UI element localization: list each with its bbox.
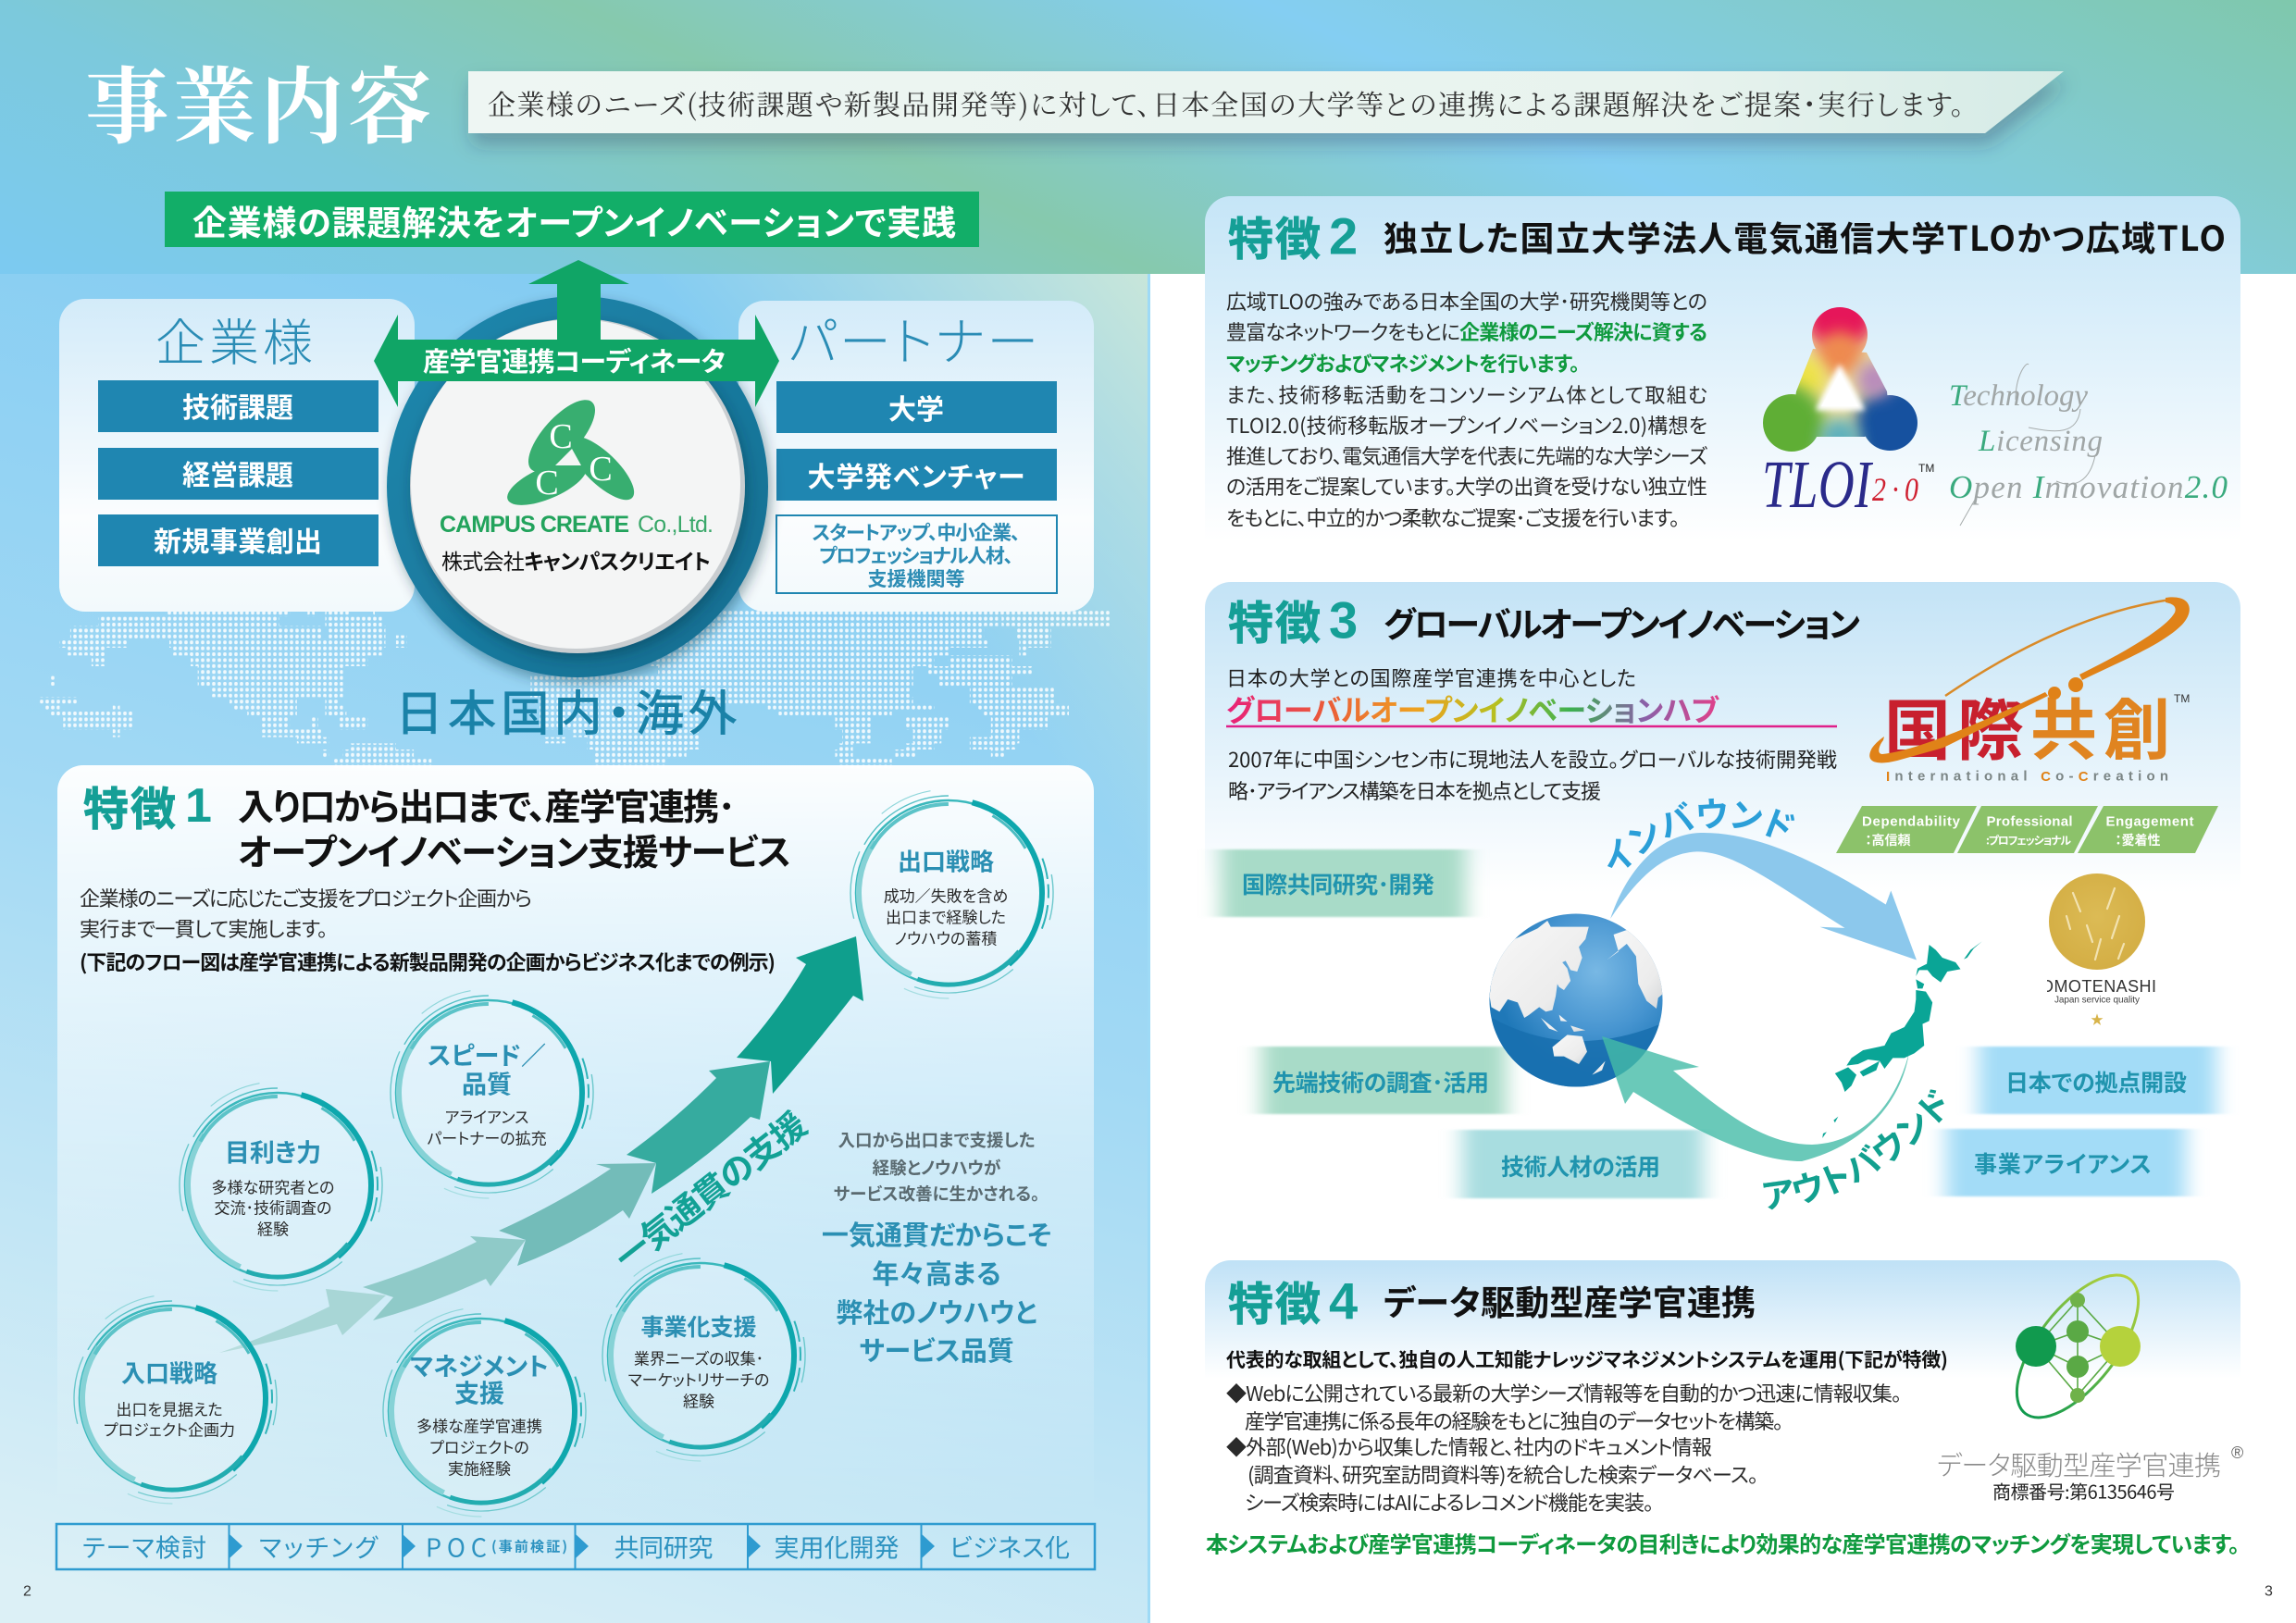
text block: 特徴3 body: 略･アライアンス構築を日本を拠点として支援 <box>1228 775 1601 805</box>
badges: values <box>1836 806 2218 853</box>
heading: 特徴1: 1 <box>185 779 212 833</box>
circle: 入口戦略: プロジェクト企画力 <box>104 1418 235 1440</box>
arrows: coordinator: 産学官連携コーディネータ <box>423 341 726 379</box>
text block: intro: 企業様のニーズに応じたご支援をプロジェクト企画から <box>80 883 532 912</box>
text: trademark: データ駆動型産学官連携 <box>1937 1444 2221 1483</box>
circle: 事業化支援: 経験 <box>683 1388 714 1412</box>
text: Technology Licensing Open Innovation <box>1949 364 2228 526</box>
text block: 特徴4 body <box>1226 1345 1948 1517</box>
circle: マネジメント支援: プロジェクトの <box>429 1434 529 1458</box>
icon: globe <box>1490 914 1664 1096</box>
text block: ノウハウ: 年々高まる <box>872 1253 1001 1292</box>
title: 事業内容 <box>85 40 431 160</box>
icon: TLOI 2.0 logo: TLOI <box>1762 447 1873 522</box>
flow bar: マッチング <box>259 1529 379 1564</box>
label: インバウンド: インバウンド <box>1607 798 1794 868</box>
heading: 特徴3: グローバルオープンイノベーション <box>1384 597 1860 647</box>
flow bar: (事前検証) <box>491 1536 567 1556</box>
centre circle: Campus Create <box>387 296 768 677</box>
text block: 特徴4 body: 産学官連携に係る長年の経験をもとに独自のデータセットを構築。 <box>1245 1406 1783 1435</box>
subtitle banner <box>468 71 2064 133</box>
text block: ノウハウ: サービス品質 <box>859 1330 1014 1369</box>
text block: 特徴2 body: マッチングおよびマネジメントを行います。 <box>1226 348 1580 378</box>
arrow label: 一気通貫の支援: 一気通貫の支援 <box>602 1098 815 1280</box>
circle: スピード／品質 <box>342 947 635 1239</box>
text block: 特徴3 body: グローバルオープンイノベーションハブ <box>1226 688 1720 730</box>
badges: values: Dependability <box>1862 814 1961 829</box>
text block: 特徴3 body: 2007年に中国シンセン市に現地法人を設立。グローバルな技術開発戦 <box>1228 744 1837 774</box>
label: インバウンド <box>1607 798 1794 868</box>
circle: 出口戦略: 出口まで経験した <box>886 905 1006 927</box>
text: Technology Licensing Open Innovation: Licensing <box>1978 425 2103 458</box>
circle: 事業化支援: 事業化支援 <box>640 1309 757 1343</box>
circle: 入口戦略 <box>26 1252 318 1544</box>
panel: パートナー: 大学発ベンチャー <box>807 454 1025 495</box>
circle: 事業化支援 <box>554 1209 847 1502</box>
icon: data-driven network logo <box>1994 1256 2161 1437</box>
flow bar <box>56 1524 1095 1569</box>
flow bar: POC <box>426 1529 487 1564</box>
text block: 特徴2 body: また、技術移転活動をコンソーシアム体として取組む <box>1226 379 1707 409</box>
box: 国際共同研究・開発: 国際共同研究･開発 <box>1242 867 1434 900</box>
centre circle: Campus Create: Co.,Ltd. <box>638 512 714 538</box>
text: trademark: ® <box>2231 1443 2243 1462</box>
circle: マネジメント支援 <box>335 1265 627 1557</box>
panel: パートナー: スタートアップ、中小企業、 <box>813 518 1020 546</box>
heading: 特徴1: 特徴 <box>83 774 176 838</box>
green heading banner: 企業様の課題解決をオープンイノベーションで実践 <box>192 195 956 245</box>
text block: ノウハウ <box>822 1128 1051 1369</box>
text block: 特徴2 body: TLOI2.0(技術移転版オープンイノベーション2.0)構想を <box>1226 410 1707 440</box>
text block: 特徴4 body: ◆外部(Web)から収集した情報と、社内のドキュメント情報 <box>1226 1431 1712 1461</box>
arrow: inbound <box>1610 833 1917 960</box>
panel: パートナー: 大学 <box>888 387 944 427</box>
box: 事業アライアンス: 事業アライアンス <box>1974 1146 2152 1180</box>
circle: 出口戦略: 成功／失敗を含め <box>884 883 1008 907</box>
icon: Campus Create logo: C <box>549 417 573 456</box>
box: 技術人材の活用 <box>1462 1130 1704 1198</box>
arrows: coordinator <box>374 260 779 407</box>
circle: マネジメント支援: 実施経験 <box>448 1456 511 1479</box>
arrow: outbound <box>1602 1036 1909 1161</box>
icon: TLOI 2.0 logo: TM <box>1918 462 1934 475</box>
panel: パートナー: プロフェッショナル人材、 <box>819 541 1013 569</box>
box: 技術人材の活用: 技術人材の活用 <box>1501 1149 1660 1183</box>
panel: 特徴4 <box>1205 1256 2243 1558</box>
heading: 特徴1: オープンイノベーション支援サービス <box>238 824 791 876</box>
text block: ノウハウ: 弊社のノウハウと <box>836 1292 1037 1331</box>
flow bar: テーマ検討 <box>82 1529 206 1564</box>
badges: values: ：愛着性 <box>2116 831 2160 849</box>
badges: values: Engagement <box>2106 814 2193 829</box>
circle: スピード／品質: 品質 <box>462 1064 512 1101</box>
circle: マネジメント支援: マネジメント <box>410 1347 549 1382</box>
icon: Campus Create logo: C <box>535 464 559 502</box>
circle: 入口戦略: 入口戦略 <box>121 1355 217 1390</box>
icon: Campus Create logo: C <box>589 450 613 489</box>
heading: 特徴2: 独立した国立大学法人電気通信大学TLOかつ広域TLO <box>1384 211 2226 261</box>
text block: 特徴3 body: 日本の大学との国際産学官連携を中心とした <box>1226 663 1636 692</box>
icon: 国際共創 logo: TM <box>2174 692 2190 705</box>
panel: 企業様: 経営課題 <box>182 452 293 493</box>
text block: 特徴4 body: シーズ検索時にはAIによるレコメンド機能を実装。 <box>1245 1487 1654 1517</box>
circle: 事業化支援: マーケットリサーチの <box>628 1368 769 1390</box>
circle: 目利き力: 目利き力 <box>225 1133 321 1170</box>
text block: 特徴2 body <box>1226 286 1707 532</box>
text block: 特徴2 body: の活用をご提案しています。大学の出資を受けない独立性 <box>1226 471 1707 501</box>
heading: 特徴1: 入り口から出口まで、産学官連携･ <box>238 779 736 831</box>
page number 3: 3 <box>2265 1584 2273 1599</box>
flow bar: ビジネス化 <box>949 1529 1070 1564</box>
circle: 目利き力: 多様な研究者との <box>212 1175 334 1197</box>
label: アウトバウンド: アウトバウンド <box>1763 1089 1944 1210</box>
panel: パートナー: 支援機関等 <box>868 564 964 592</box>
panel: パートナー: パートナー <box>788 302 1038 376</box>
panel: 企業様: 企業様 <box>155 302 313 376</box>
panel: 特徴1 <box>26 747 1095 1557</box>
icon: TLOI 2.0 logo <box>1763 307 1934 507</box>
text block: 特徴2 body: 推進しており、電気通信大学を代表に先端的な大学シーズ <box>1226 440 1707 470</box>
circle: マネジメント支援: 多様な産学官連携 <box>416 1414 542 1436</box>
icon: 国際共創 logo: 国際共創 <box>1884 675 2170 774</box>
arrow: rising flow <box>219 936 863 1353</box>
text block: 特徴4 body: ◆Webに公開されている最新の大学シーズ情報等を自動的かつ迅速に情報収集。 <box>1226 1378 1902 1407</box>
text block: ノウハウ: 経験とノウハウが <box>873 1156 1001 1180</box>
panel: 企業様: 技術課題 <box>182 385 293 426</box>
text block: intro: 実行まで一貫して実施します。 <box>80 913 328 943</box>
map: Japan <box>1822 941 1982 1138</box>
panel: 特徴2 <box>1205 196 2240 546</box>
heading: 特徴3: 特徴 <box>1228 587 1321 653</box>
box: 国際共同研究・開発 <box>1221 849 1466 917</box>
circle: 事業化支援: 業界ニーズの収集･ <box>634 1345 763 1369</box>
icon: TLOI 2.0 logo: 2·0 <box>1872 471 1918 509</box>
label: 日本国内・海外: 日本国内・海外 <box>395 675 737 744</box>
heading: 特徴2: 特徴 <box>1228 204 1321 268</box>
icon: 国際共創 logo <box>1869 597 2190 785</box>
circle: 出口戦略 <box>802 747 1095 1039</box>
text block: intro: (下記のフロー図は産学官連携による新製品開発の企画からビジネス化までの例示) <box>80 947 776 976</box>
heading: 特徴2: 2 <box>1329 207 1358 265</box>
text: trademark: 商標番号:第6135646号 <box>1992 1477 2175 1505</box>
text block: 特徴3 body <box>1226 663 1837 805</box>
text block: intro <box>80 883 776 976</box>
box: 先端技術の調査・活用: 先端技術の調査･活用 <box>1272 1065 1489 1098</box>
heading: 特徴3: 3 <box>1329 590 1358 650</box>
centre circle: Campus Create: 株式会社キャンパスクリエイト <box>441 544 711 576</box>
icon: OMOTENASHI: Japan service quality <box>2054 996 2140 1005</box>
badges: values: :プロフェッショナル <box>1986 833 2071 848</box>
panel: 特徴3 <box>1205 582 2240 1210</box>
text block: 特徴2 body: 豊富なネットワークをもとに企業様のニーズ解決に資する <box>1226 316 1707 346</box>
icon: OMOTENASHI: OMOTENASHI <box>2041 977 2156 996</box>
heading: 特徴4: データ駆動型産学官連携 <box>1384 1275 1756 1325</box>
icon: OMOTENASHI <box>2041 873 2156 1029</box>
panel: パートナー <box>738 301 1094 612</box>
icon: Campus Create logo <box>502 390 643 514</box>
circle: 入口戦略: 出口を見据えた <box>116 1397 223 1419</box>
text block: ノウハウ: サービス改善に生かされる。 <box>834 1182 1039 1206</box>
heading: 特徴2 <box>1228 204 2226 268</box>
text block: 特徴2 body: をもとに、中立的かつ柔軟なご提案･ご支援を行います。 <box>1226 502 1680 532</box>
subtitle banner: 企業様のニーズ(技術課題や新製品開発等)に対して、日本全国の大学等との連携による課題解決をご提案・実行します。 <box>488 82 1965 123</box>
circle: 出口戦略: ノウハウの蓄積 <box>895 925 997 949</box>
heading: 特徴4: 4 <box>1329 1271 1358 1331</box>
box: 日本での拠点開設: 日本での拠点開設 <box>2005 1065 2187 1098</box>
text: trademark <box>1937 1443 2243 1505</box>
world map dot pattern <box>40 611 1110 765</box>
icon: 国際共創 logo: I nternational C o- C reation <box>1886 768 2168 785</box>
centre circle: Campus Create: CAMPUS CREATE <box>440 512 629 538</box>
circle: マネジメント支援: 支援 <box>454 1373 504 1410</box>
text: Technology Licensing Open Innovation: Open Innovation2.0 <box>1949 469 2228 505</box>
page number 2: 2 <box>23 1584 31 1599</box>
circle: 目利き力: 経験 <box>257 1216 289 1240</box>
heading: 特徴1 <box>83 774 791 876</box>
circle: スピード／品質: アライアンス <box>445 1105 528 1127</box>
text block: 特徴4 body: (調査資料、研究室訪問資料等)を統合した検索データベース。 <box>1247 1459 1758 1489</box>
box: 事業アライアンス <box>1946 1129 2186 1196</box>
text: Technology Licensing Open Innovation: Technology <box>1949 379 2088 413</box>
text block: 特徴2 body: 広域TLOの強みである日本全国の大学･研究機関等との <box>1226 286 1707 316</box>
badges: values: ：高信頼 <box>1866 831 1910 849</box>
circle: 出口戦略: 出口戦略 <box>898 844 994 877</box>
heading: 特徴4 <box>1228 1268 1756 1334</box>
panel: 企業様: 新規事業創出 <box>154 519 322 560</box>
text block: 特徴4 body: 代表的な取組として、独自の人工知能ナレッジマネジメントシステムを運用(下記が特徴) <box>1226 1345 1948 1373</box>
text block: ノウハウ: 一気通貫だからこそ <box>822 1214 1051 1253</box>
circle: 目利き力 <box>131 1039 424 1332</box>
circle: 目利き力: 交流･技術調査の <box>215 1196 331 1218</box>
box: 先端技術の調査・活用 <box>1261 1047 1507 1114</box>
callout: bottom green: 本システムおよび産学官連携コーディネータの目利きにより効果的な産学官連携のマッチングを実現しています。 <box>1206 1527 2240 1558</box>
flow bar: 実用化開発 <box>774 1529 900 1564</box>
circle: スピード／品質: パートナーの拡充 <box>427 1125 547 1149</box>
flow bar: 共同研究 <box>614 1529 713 1564</box>
heading: 特徴4: 特徴 <box>1228 1268 1321 1334</box>
box: 日本での拠点開設 <box>1979 1047 2216 1114</box>
badges: values: Professional <box>1986 814 2073 829</box>
panel: 企業様 <box>59 299 415 612</box>
text block: ノウハウ: 入口から出口まで支援した <box>838 1128 1035 1152</box>
icon: OMOTENASHI: ★ <box>2091 1010 2104 1029</box>
circle: スピード／品質: スピード／ <box>428 1036 546 1072</box>
heading: 特徴3 <box>1228 587 1860 653</box>
